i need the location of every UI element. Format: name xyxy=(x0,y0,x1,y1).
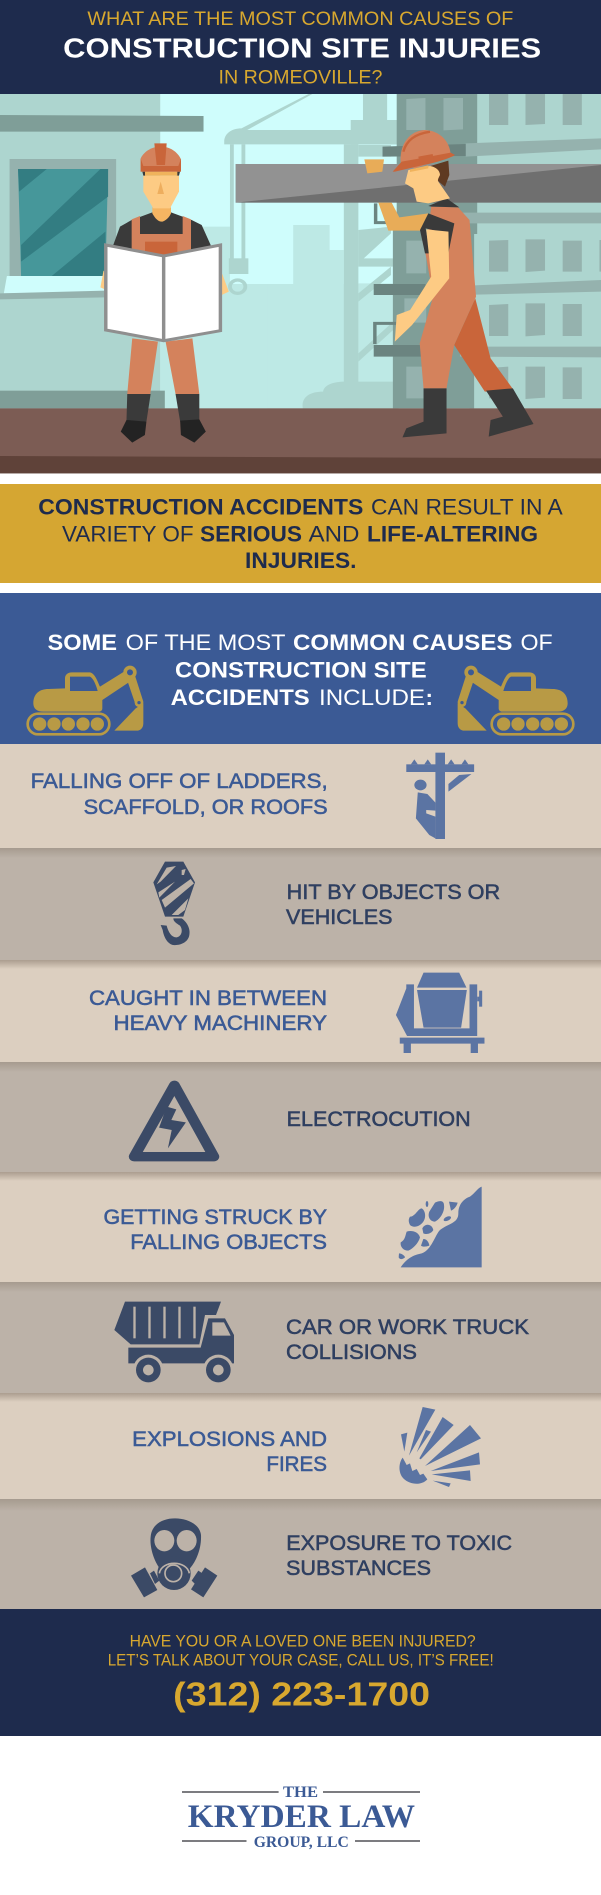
steel beam xyxy=(236,164,601,203)
heading line 3: IN ROMEOVILLE? xyxy=(218,66,383,88)
statement line 2: VARIETY OF xyxy=(62,521,194,546)
text: hit by objects: HIT BY OBJECTS OR xyxy=(287,881,500,904)
statement line 2: AND xyxy=(308,521,360,546)
text: falling objects: GETTING STRUCK BY xyxy=(104,1206,327,1229)
cta text xyxy=(108,1633,494,1670)
illustration: construction workers xyxy=(0,94,601,473)
worker carrying beam xyxy=(364,130,534,437)
text: explosions xyxy=(132,1428,327,1476)
phone number: (312) 223-1700 xyxy=(173,1676,430,1713)
icon: explosion xyxy=(399,1407,481,1487)
gold statement banner xyxy=(0,484,601,583)
intro line 1: OF xyxy=(520,630,553,655)
header banner xyxy=(0,0,601,94)
statement line 3: INJURIES. xyxy=(245,548,356,573)
blue intro panel xyxy=(0,593,601,744)
worker reading plans xyxy=(100,143,229,443)
statement line 1: CAN RESULT IN A xyxy=(371,495,563,520)
text: caught in machinery xyxy=(89,987,327,1035)
row 7: explosions xyxy=(0,1393,601,1499)
statement line 2: SERIOUS xyxy=(200,521,302,546)
cta text: HAVE YOU OR A LOVED ONE BEEN INJURED? xyxy=(130,1633,476,1651)
intro line 3: : xyxy=(426,685,433,710)
icon: worker climbing pole xyxy=(406,753,474,839)
text: toxic substances: SUBSTANCES xyxy=(286,1557,431,1580)
row 2: hit by objects xyxy=(0,848,601,960)
right buildings xyxy=(374,94,601,408)
text: hit by objects xyxy=(286,881,500,929)
intro line 2: CONSTRUCTION SITE xyxy=(175,658,427,683)
row 6: truck collisions xyxy=(0,1282,601,1393)
icon: cement mixer xyxy=(396,973,484,1053)
text: toxic substances: EXPOSURE TO TOXIC xyxy=(286,1532,512,1555)
icon: dump truck xyxy=(114,1302,234,1385)
icon: crane hook xyxy=(153,862,195,945)
logo: The Kryder Law Group: GROUP, LLC xyxy=(254,1834,349,1851)
city silhouettes xyxy=(160,94,399,408)
left building xyxy=(0,94,204,408)
text: falls xyxy=(31,770,328,819)
ground xyxy=(0,408,601,473)
row 4: electrocution xyxy=(0,1062,601,1172)
statement line 1: CONSTRUCTION ACCIDENTS xyxy=(38,495,363,520)
text: truck collisions xyxy=(286,1316,529,1364)
intro line 1: OF THE MOST xyxy=(126,630,286,655)
intro line 1: SOME xyxy=(48,630,117,655)
cta text: LET’S TALK ABOUT YOUR CASE, CALL US, IT’S FREE! xyxy=(108,1652,494,1670)
text: falls: SCAFFOLD, OR ROOFS xyxy=(84,796,328,819)
text: truck collisions: CAR OR WORK TRUCK xyxy=(286,1316,529,1339)
statement line 2 xyxy=(62,521,538,546)
intro line 3 xyxy=(171,685,433,710)
logo: The Kryder Law Group xyxy=(182,1784,420,1851)
text: explosions: EXPLOSIONS AND xyxy=(132,1428,327,1451)
icon: high voltage triangle xyxy=(134,1085,214,1157)
icon: rockfall xyxy=(399,1187,482,1267)
statement line 2: LIFE-ALTERING xyxy=(367,521,538,546)
footer call to action xyxy=(0,1609,601,1736)
text: falls: FALLING OFF OF LADDERS, xyxy=(31,770,328,793)
text: falling objects: FALLING OBJECTS xyxy=(130,1231,327,1254)
text: truck collisions: COLLISIONS xyxy=(286,1341,417,1364)
heading line 1: WHAT ARE THE MOST COMMON CAUSES OF xyxy=(87,8,513,30)
intro line 1 xyxy=(48,630,553,655)
main title: CONSTRUCTION SITE INJURIES xyxy=(63,32,541,63)
row 1: falls xyxy=(0,744,601,848)
icon: excavator right xyxy=(458,666,573,734)
row 5: falling objects xyxy=(0,1172,601,1282)
logo: The Kryder Law Group: THE xyxy=(283,1784,318,1801)
statement line 1 xyxy=(38,495,563,520)
row 3: caught in machinery xyxy=(0,960,601,1062)
intro line 3: INCLUDE xyxy=(319,685,425,710)
intro line 1: COMMON CAUSES xyxy=(293,630,513,655)
text: electrocution: ELECTROCUTION xyxy=(287,1108,471,1131)
text: toxic substances xyxy=(286,1532,512,1580)
text: caught in machinery: HEAVY MACHINERY xyxy=(114,1012,327,1035)
logo: The Kryder Law Group: KRYDER LAW xyxy=(188,1799,415,1835)
text: falling objects xyxy=(104,1206,327,1254)
icon: excavator left xyxy=(28,666,143,734)
text: caught in machinery: CAUGHT IN BETWEEN xyxy=(89,987,327,1010)
text: explosions: FIRES xyxy=(266,1453,327,1476)
intro line 3: ACCIDENTS xyxy=(171,685,310,710)
text: hit by objects: VEHICLES xyxy=(286,906,392,929)
row 8: toxic substances xyxy=(0,1499,601,1609)
icon: gas mask xyxy=(131,1518,217,1597)
